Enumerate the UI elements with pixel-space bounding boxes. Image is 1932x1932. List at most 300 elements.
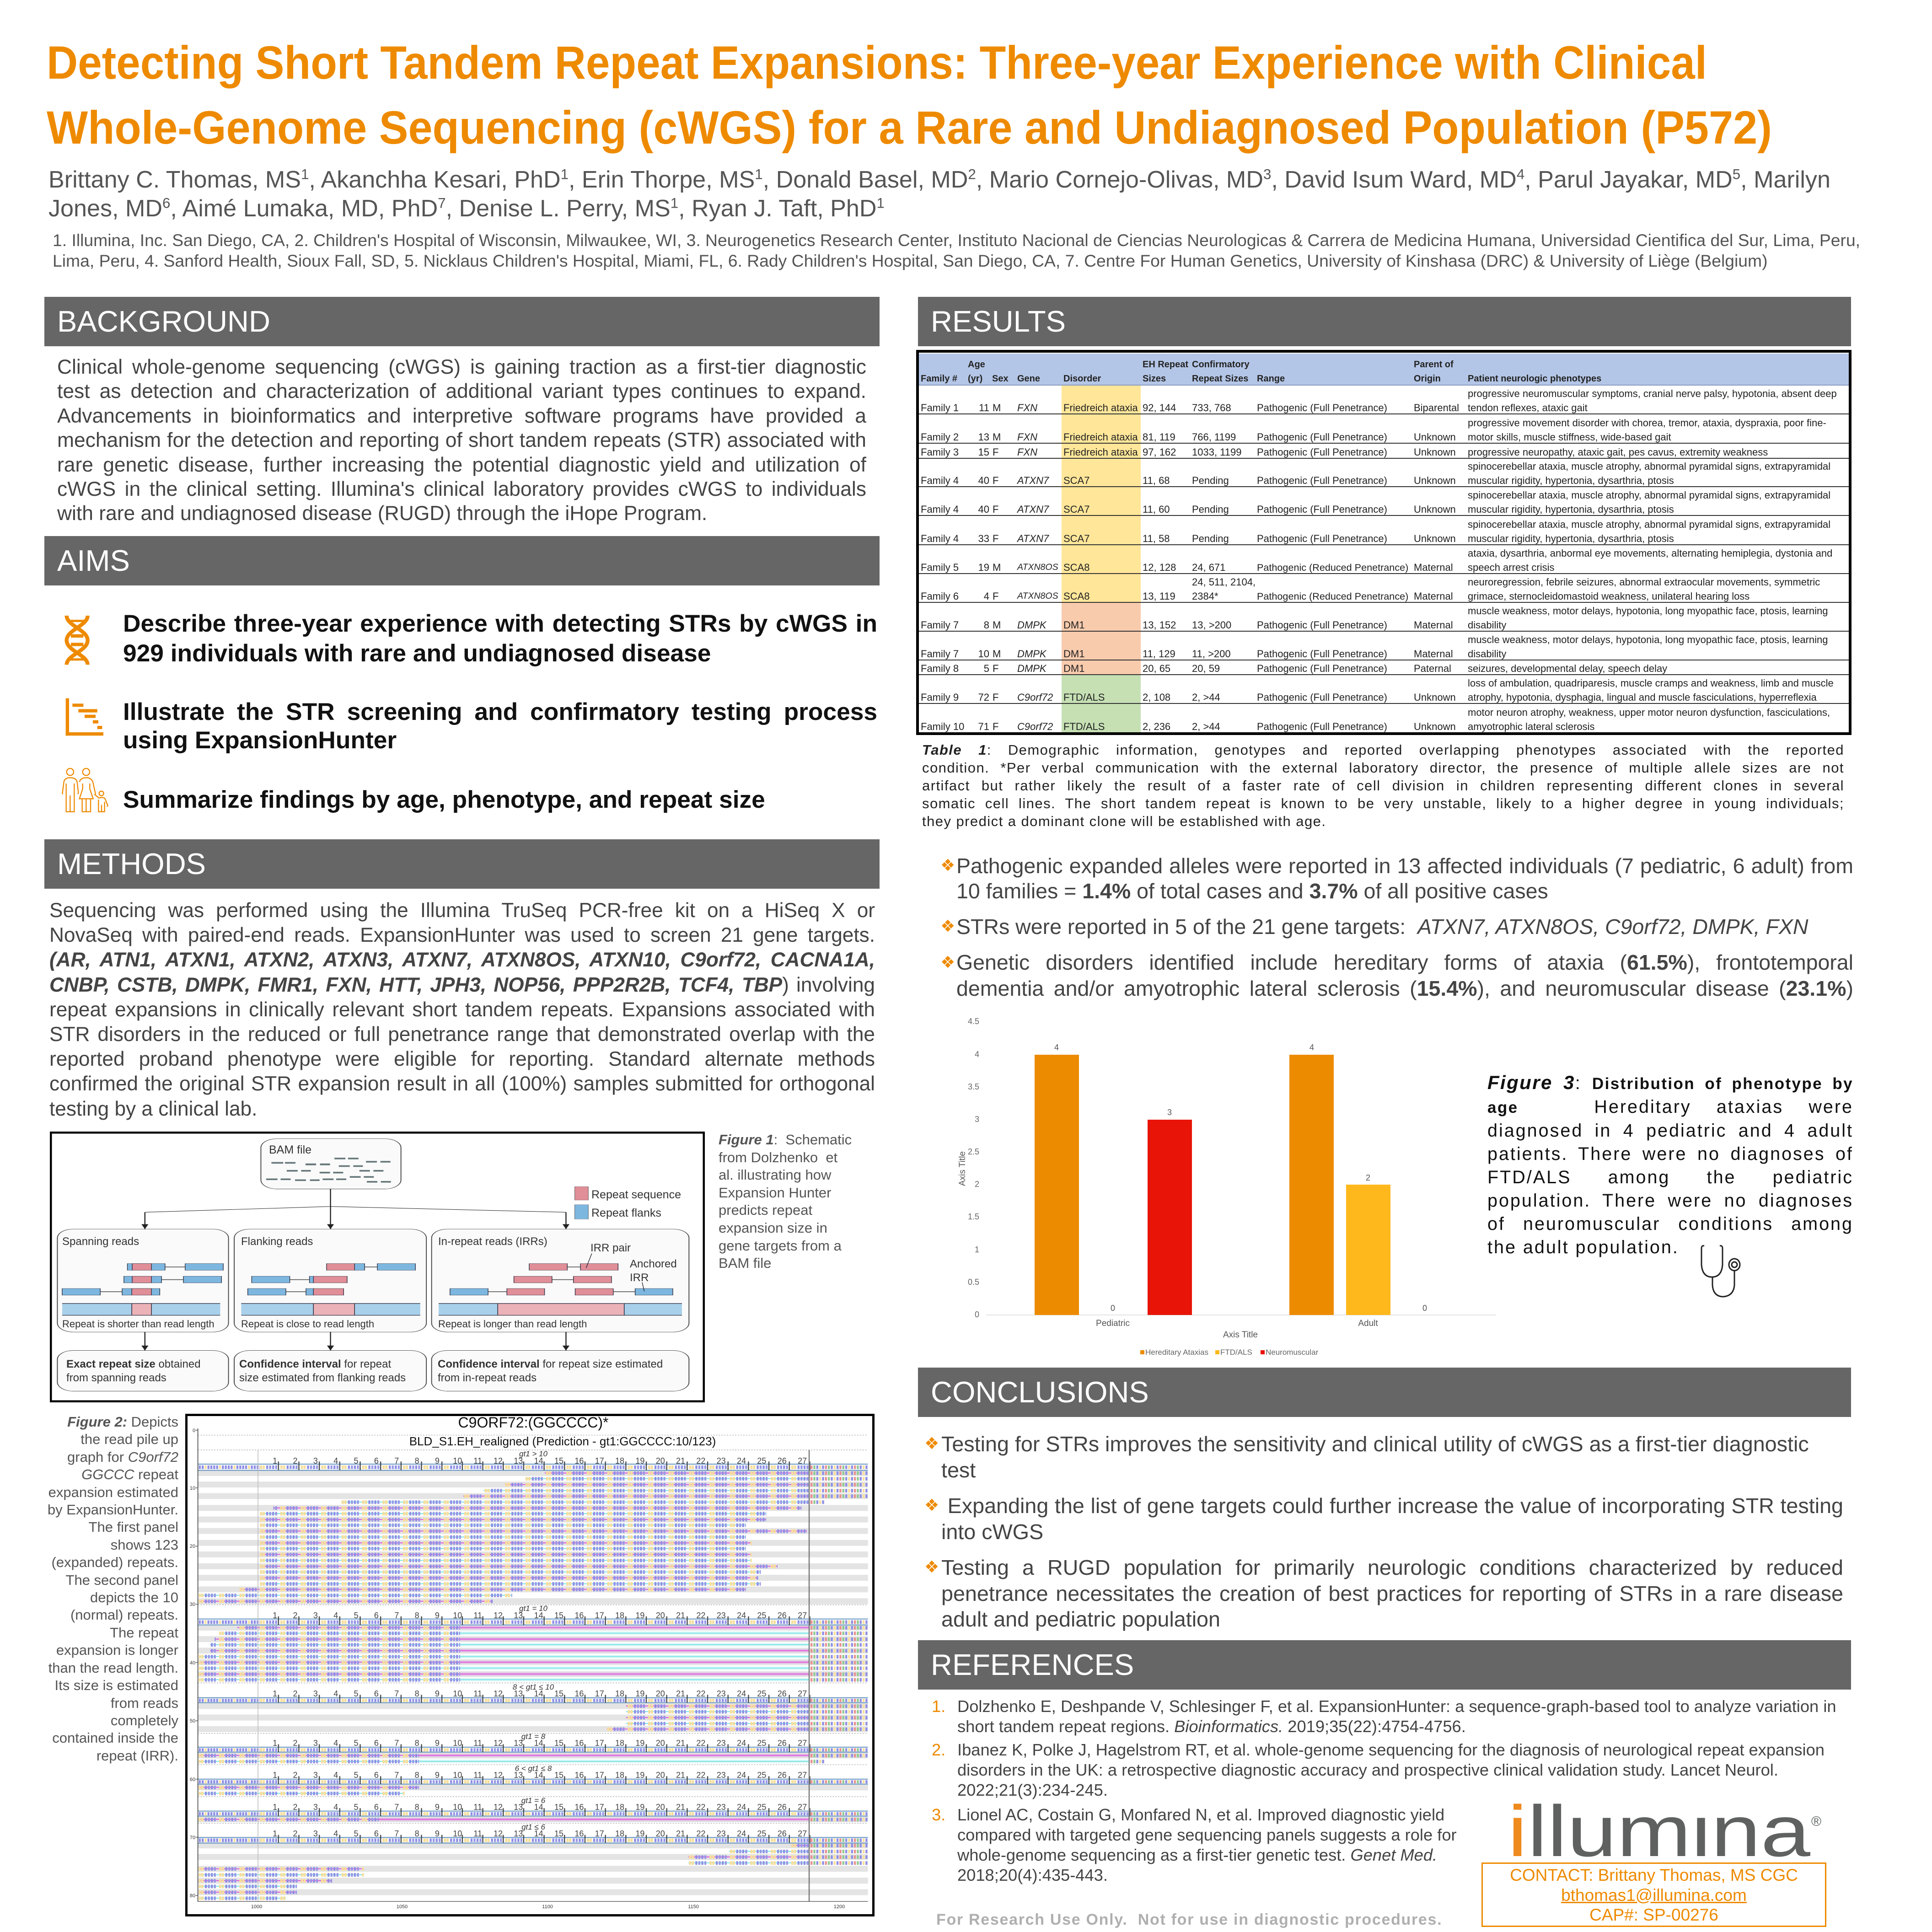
background text: rare genetic disease, further increasing the potential diagnostic yield and utilization of <box>57 454 866 476</box>
position numbers: 6 < gt1 <= 8: 7 <box>394 1771 399 1780</box>
row: family 1: Family 1 <box>921 402 959 413</box>
position numbers: 6 < gt1 <= 8: 11 <box>473 1771 482 1780</box>
figure 2: read pile-up graph: 30 <box>190 1602 195 1607</box>
figure 2 caption: expansion estimated <box>48 1484 178 1500</box>
position numbers: gt1 > 10: 16 <box>574 1456 584 1465</box>
position numbers: gt1 > 10: 1 <box>273 1456 277 1465</box>
figure 3 caption: of neuromuscular conditions among <box>1487 1214 1853 1234</box>
row: family 2: 13 <box>978 431 989 443</box>
bar chart: phenotype by age: Pediatric <box>1096 1319 1130 1328</box>
position numbers: gt1 = 6: 26 <box>778 1803 787 1812</box>
background text: mechanism for the detection and reporting of short tandem repeats (STR) associated with <box>57 429 866 451</box>
row: family 4b: 11, 60 <box>1143 504 1170 515</box>
position numbers: gt1 > 10: 14 <box>534 1456 543 1465</box>
row: family 7a: 13, 152 <box>1143 619 1176 631</box>
table 1 caption: condition. *Per verbal communication with the external laboratory director, the presence of multiple allele sizes are not <box>922 760 1844 776</box>
row: family 7b: Pathogenic (Full Penetrance) <box>1257 648 1387 660</box>
figure 2 caption: contained inside the <box>52 1730 178 1746</box>
bar chart: phenotype by age: Neuromuscular <box>1266 1348 1319 1357</box>
row: family 2: Friedreich ataxia <box>1063 431 1138 443</box>
bar chart: phenotype by age: 2 <box>975 1180 979 1189</box>
row: family 4c: Unknown <box>1414 533 1456 544</box>
row: family 7a: DMPK <box>1017 619 1046 631</box>
row: family 8: 20, 65 <box>1143 663 1170 674</box>
table header: Disorder <box>1063 374 1101 384</box>
row: family 9 <box>919 675 1849 704</box>
legend swatches <box>575 1186 588 1200</box>
position numbers: gt1 = 6: 21 <box>676 1803 685 1812</box>
figure 2 caption: (normal) repeats. <box>70 1607 178 1623</box>
row: family 4c: spinocerebellar ataxia, muscle atrophy, abnormal pyramidal signs, extrapyramidal <box>1468 519 1830 530</box>
figure 2 caption: by ExpansionHunter. <box>48 1502 178 1518</box>
panel: conclusions: ❖ <box>924 1558 939 1577</box>
position numbers: gt1 = 10: 7 <box>394 1611 399 1620</box>
figure 1 caption: BAM file <box>719 1255 771 1271</box>
row: family 4b: Family 4 <box>921 504 959 515</box>
reference 1 <box>957 1696 1849 1736</box>
conclusion 3: adult and pediatric population <box>941 1607 1220 1631</box>
position numbers: gt1 = 6: 6 <box>374 1803 379 1812</box>
table header <box>919 354 1849 386</box>
row: family 5: Maternal <box>1414 562 1453 573</box>
position numbers: gt1 <= 6: 8 <box>415 1829 419 1838</box>
reference bars <box>62 1304 682 1315</box>
row: family 5: SCA8 <box>1063 562 1089 573</box>
position numbers: gt1 = 8: 24 <box>737 1739 746 1748</box>
figure 2: read pile-up graph <box>185 1414 875 1916</box>
figure 2: read pile-up graph: 1150 <box>688 1904 699 1910</box>
row: family 8: seizures, developmental delay, speech delay <box>1468 663 1667 674</box>
heading: methods: METHODS <box>57 847 206 880</box>
row: family 7b: disability <box>1468 648 1506 660</box>
position numbers: gt1 = 8: 17 <box>595 1739 604 1748</box>
BAM reads <box>266 1158 391 1183</box>
position numbers: gt1 = 8: 8 <box>415 1739 419 1748</box>
row: family 3: 97, 162 <box>1143 446 1176 458</box>
position numbers: gt1 = 6: 8 <box>415 1803 419 1812</box>
reference 1: short tandem repeat regions. Bioinformatics. 2019;35(22):4754-4756. <box>957 1717 1466 1735</box>
row: family 4b: spinocerebellar ataxia, muscle atrophy, abnormal pyramidal signs, extrapyramidal <box>1468 489 1830 501</box>
position numbers: gt1 = 8: 1 <box>273 1739 277 1748</box>
affiliations: 1. Illumina, Inc. San Diego, CA, 2. Children's Hospital of Wisconsin, Milwaukee, WI, 3. Neurogenetics Research Center, Instituto Nacional de Ciencias Neurologicas & Carrera de Medicina Humana, Universidad Cientifica del Sur, Lima, Peru, <box>53 231 1860 250</box>
row: family 1: Pathogenic (Full Penetrance) <box>1257 402 1387 413</box>
row: family 9: 2, 108 <box>1143 692 1170 703</box>
row: family 2: Pathogenic (Full Penetrance) <box>1257 431 1387 443</box>
position numbers: gt1 = 8: 21 <box>676 1739 685 1748</box>
position numbers: 8 < gt1 <= 10: 24 <box>737 1689 746 1698</box>
row: family 4b: SCA7 <box>1063 504 1089 515</box>
position numbers: gt1 > 10: 2 <box>293 1456 298 1465</box>
position numbers: 8 < gt1 <= 10: 27 <box>798 1689 807 1698</box>
authors: Brittany C. Thomas, MS1, Akanchha Kesari, PhD1, Erin Thorpe, MS1, Donald Basel, MD2, Mario Cornejo-Olivas, MD3, David Isum Ward, MD4, Parul Jayakar, MD5, Marilyn <box>48 166 1830 193</box>
figure 2: read pile-up graph: 8 < gt1 ≤ 10 <box>513 1683 554 1691</box>
illumina logo: ® <box>1811 1814 1821 1829</box>
position numbers: gt1 = 10: 12 <box>494 1611 503 1620</box>
bar chart: phenotype by age: 4.5 <box>968 1017 979 1026</box>
row: family 6: grimace, sternocleidomastoid weakness, unilateral hearing loss <box>1468 590 1750 602</box>
row: family 10: FTD/ALS <box>1063 721 1105 732</box>
figure 2: read pile-up graph: 1200 <box>834 1904 845 1910</box>
figure 2: read pile-up graph: 40 <box>190 1660 195 1666</box>
position numbers: 8 < gt1 <= 10: 15 <box>554 1689 564 1698</box>
row: family 4c: SCA7 <box>1063 533 1089 544</box>
position numbers: 6 < gt1 <= 8: 14 <box>534 1771 543 1780</box>
position numbers: gt1 = 10: 27 <box>798 1611 807 1620</box>
position numbers: gt1 <= 6: 4 <box>333 1829 338 1838</box>
icon: stethoscope <box>1700 1241 1744 1299</box>
position numbers: gt1 > 10: 26 <box>778 1456 787 1465</box>
bar chart: phenotype by age: 4 <box>975 1050 979 1059</box>
background text: cWGS in the clinical setting. Illumina's clinical laboratory provides cWGS to individuals <box>57 478 866 500</box>
row: family 5: speech arrest crisis <box>1468 562 1555 573</box>
position numbers: gt1 = 10: 24 <box>737 1611 746 1620</box>
row: family 3: F <box>993 446 998 458</box>
position numbers: gt1 = 10: 13 <box>514 1611 523 1620</box>
position numbers: gt1 = 8: 15 <box>554 1739 564 1748</box>
position numbers: gt1 > 10: 27 <box>798 1456 807 1465</box>
position numbers: 6 < gt1 <= 8: 16 <box>574 1771 584 1780</box>
row: family 10: 2, >44 <box>1192 721 1220 732</box>
aim 1: 929 individuals with rare and undiagnosed disease <box>123 640 711 667</box>
position numbers: gt1 = 10: 21 <box>676 1611 685 1620</box>
position numbers: gt1 = 6: 24 <box>737 1803 746 1812</box>
row: family 10: C9orf72 <box>1017 721 1053 732</box>
row: family 7a: 13, >200 <box>1192 619 1231 631</box>
position numbers: 6 < gt1 <= 8: 5 <box>354 1771 359 1780</box>
bar chart: phenotype by age: 1 <box>975 1245 979 1254</box>
figure 3 caption: the adult population. <box>1487 1237 1679 1257</box>
figure 1: ExpansionHunter schematic: Anchored <box>630 1258 677 1270</box>
position numbers: 8 < gt1 <= 10: 10 <box>453 1689 462 1698</box>
reference 2: disorders in the UK: a retrospective diagnostic accuracy and prospective clinical validation study. Lancet Neurol. <box>957 1760 1778 1779</box>
heading: background <box>44 297 880 346</box>
position numbers: 8 < gt1 <= 10: 26 <box>778 1689 787 1698</box>
position numbers: gt1 <= 6 <box>265 1829 812 1838</box>
row: family 4a: Family 4 <box>921 475 959 486</box>
reference 3 <box>957 1805 1483 1885</box>
row: family 6: Family 6 <box>921 590 959 602</box>
row: family 2: 766, 1199 <box>1192 431 1236 443</box>
row: family 4a: muscular rigidity, hypertonia, dysarthria, ptosis <box>1468 475 1674 486</box>
figure 1: ExpansionHunter schematic: IRR pair <box>590 1242 631 1254</box>
position numbers: gt1 = 6: 20 <box>656 1803 665 1812</box>
row: family 7b <box>919 632 1849 660</box>
row: family 7b: DMPK <box>1017 648 1046 660</box>
heading: methods <box>44 839 880 889</box>
methods text: reported proband phenotype were eligible for reporting. Standard alternate methods <box>49 1048 875 1070</box>
figure 3 caption: age Hereditary ataxias were <box>1487 1097 1853 1117</box>
position numbers: 6 < gt1 <= 8: 6 <box>374 1771 379 1780</box>
row: family 5 <box>919 545 1849 574</box>
background text: test as detection and characterization of additional variant types continues to expand. <box>57 380 866 402</box>
contact box: bthomas1@illumina.com <box>1561 1885 1747 1905</box>
position numbers: gt1 <= 6: 7 <box>394 1829 399 1838</box>
result bullet 3: dementia and/or amyotrophic lateral sclerosis (15.4%), and neuromuscular disease (23.1%) <box>956 977 1853 1000</box>
position numbers: gt1 = 8: 14 <box>534 1739 543 1748</box>
position numbers: 8 < gt1 <= 10: 4 <box>333 1689 338 1698</box>
position numbers: gt1 = 10: 1 <box>273 1611 277 1620</box>
row: family 4c: 33 <box>978 533 989 544</box>
row: family 4c: F <box>993 533 998 544</box>
row: family 1: FXN <box>1017 402 1037 413</box>
figure 1: ExpansionHunter schematic: Repeat sequence <box>591 1188 681 1201</box>
contact box: CONTACT: Brittany Thomas, MS CGC <box>1510 1866 1798 1884</box>
figure 2: read pile-up graph: 0 <box>193 1428 195 1433</box>
position numbers: gt1 > 10 <box>265 1456 812 1465</box>
position numbers: gt1 = 8: 11 <box>473 1739 482 1748</box>
row: family 4a: 40 <box>978 475 989 486</box>
figure 1 caption: predicts repeat <box>719 1202 812 1218</box>
row: family 2: progressive movement disorder with chorea, tremor, ataxia, dyspraxia, poor fine- <box>1468 417 1826 429</box>
aim 1: Describe three-year experience with detecting STRs by cWGS in <box>123 610 877 637</box>
methods text: NovaSeq with paired-end reads. ExpansionHunter was used to screen 21 gene targets. <box>49 924 875 946</box>
position numbers: gt1 = 8: 9 <box>435 1739 440 1748</box>
figure 2: read pile-up graph: 60 <box>190 1777 195 1782</box>
figure 1: ExpansionHunter schematic <box>50 1132 705 1402</box>
position numbers: gt1 = 10: 8 <box>415 1611 419 1620</box>
position numbers: 6 < gt1 <= 8: 12 <box>494 1771 503 1780</box>
row: family 5: Family 5 <box>921 562 959 573</box>
position numbers: gt1 > 10: 13 <box>514 1456 523 1465</box>
position numbers: gt1 <= 6: 5 <box>354 1829 359 1838</box>
figure 1 caption: from Dolzhenko et <box>719 1149 837 1165</box>
row: family 5: 12, 128 <box>1143 562 1176 573</box>
position numbers: gt1 = 10: 25 <box>757 1611 766 1620</box>
row: family 7b: 10 <box>978 648 989 660</box>
position numbers: gt1 <= 6: 15 <box>554 1829 564 1838</box>
panel: conclusions: ❖ <box>924 1496 939 1515</box>
reference bars <box>260 1465 809 1842</box>
row: family 4a: spinocerebellar ataxia, muscle atrophy, abnormal pyramidal signs, extrapyramidal <box>1468 461 1830 472</box>
flow lines <box>145 1189 566 1351</box>
position numbers: gt1 > 10: 3 <box>313 1456 318 1465</box>
figure 1: ExpansionHunter schematic: size estimated from flanking reads <box>239 1372 406 1384</box>
row: family 4c <box>919 516 1849 545</box>
panel: references: 1. <box>932 1697 945 1716</box>
result bullet 3 <box>956 950 1853 1002</box>
row: family 9: Unknown <box>1414 692 1456 703</box>
panel: aims <box>44 536 880 833</box>
background text: Clinical whole-genome sequencing (cWGS) is gaining traction as a first-tier diagnostic <box>57 356 866 378</box>
pink read segments <box>132 1264 618 1295</box>
position numbers: gt1 = 6: 25 <box>757 1803 766 1812</box>
position numbers: gt1 = 10: 17 <box>595 1611 604 1620</box>
position numbers: gt1 <= 6: 26 <box>778 1829 787 1838</box>
position numbers: gt1 = 6: 3 <box>313 1803 318 1812</box>
row: family 3 <box>919 444 1849 459</box>
row: family 1: Friedreich ataxia <box>1063 402 1138 413</box>
row: family 4b: muscular rigidity, hypertonia, dysarthria, ptosis <box>1468 504 1674 515</box>
figure 2: read pile-up graph: 1100 <box>542 1904 553 1910</box>
row: family 10 <box>919 704 1849 732</box>
title <box>41 32 1788 165</box>
row: family 1: tendon reflexes, ataxic gait <box>1468 402 1588 413</box>
position numbers: 8 < gt1 <= 10: 22 <box>696 1689 705 1698</box>
position numbers: gt1 <= 6: 12 <box>494 1829 503 1838</box>
background text: with rare and undiagnosed disease (RUGD) through the iHope Program. <box>57 502 707 525</box>
position numbers: gt1 = 10: 18 <box>615 1611 624 1620</box>
position numbers: gt1 > 10: 4 <box>333 1456 338 1465</box>
figure 2: read pile-up graph: 6 < gt1 ≤ 8 <box>515 1764 552 1773</box>
row: family 5: 19 <box>978 562 989 573</box>
position numbers: 8 < gt1 <= 10: 8 <box>415 1689 419 1698</box>
methods text <box>49 898 875 1122</box>
position numbers: gt1 = 10: 3 <box>313 1611 318 1620</box>
position numbers: gt1 = 6: 16 <box>574 1803 584 1812</box>
row: family 2: 81, 119 <box>1143 431 1175 443</box>
position numbers: gt1 = 10: 2 <box>293 1611 298 1620</box>
figure 2 caption <box>41 1413 178 1765</box>
row: family 4c: 11, 58 <box>1143 533 1170 544</box>
position numbers: gt1 = 6: 22 <box>696 1803 705 1812</box>
bar chart: phenotype by age: Axis Title <box>958 1151 967 1186</box>
position numbers: gt1 = 8: 13 <box>514 1739 523 1748</box>
table 1 caption: somatic cell lines. The short tandem repeat is known to be very unstable, likely to a higher degree in young individuals; <box>922 795 1844 811</box>
figure 2 caption: expansion is longer <box>56 1642 178 1658</box>
position numbers: gt1 > 10: 6 <box>374 1456 379 1465</box>
position numbers: gt1 = 10: 4 <box>333 1611 338 1620</box>
row: family 5: M <box>993 562 1001 573</box>
figure 3 caption: FTD/ALS among the pediatric <box>1487 1167 1853 1187</box>
position numbers: gt1 = 6: 5 <box>354 1803 359 1812</box>
bar chart: phenotype by age: 3 <box>975 1115 979 1124</box>
row: family 4b: Pending <box>1192 504 1229 515</box>
table 1 caption: Table 1: Demographic information, genotypes and reported overlapping phenotypes associated with the reported <box>922 742 1844 758</box>
row: family 6: SCA8 <box>1063 590 1089 602</box>
position numbers: gt1 > 10: 22 <box>696 1456 705 1465</box>
figure 1: ExpansionHunter schematic: Repeat is longer than read length <box>438 1318 587 1330</box>
group rows: expanded reads <box>199 1471 809 1900</box>
conclusion 1: test <box>941 1458 976 1482</box>
conclusion 2: Expanding the list of gene targets could further increase the value of incorporating STR testing <box>948 1494 1843 1518</box>
position numbers: 6 < gt1 <= 8: 19 <box>635 1771 644 1780</box>
row: family 6: 4 <box>984 590 989 602</box>
position numbers: gt1 = 6: 4 <box>333 1803 338 1812</box>
position numbers: 8 < gt1 <= 10: 21 <box>676 1689 685 1698</box>
row: family 9: FTD/ALS <box>1063 692 1105 703</box>
row: family 4a: Pending <box>1192 475 1229 486</box>
figure 2: read pile-up graph: 10 <box>190 1486 195 1491</box>
position numbers: gt1 = 10: 9 <box>435 1611 440 1620</box>
table header: Confirmatory <box>1192 360 1250 370</box>
figure 2 caption: shows 123 <box>111 1537 178 1553</box>
position numbers: 8 < gt1 <= 10: 25 <box>757 1689 766 1698</box>
figure 2 caption: repeat (IRR). <box>97 1748 178 1764</box>
figure 2: read pile-up graph: gt1 = 10 <box>519 1604 548 1613</box>
position numbers: 8 < gt1 <= 10 <box>265 1689 812 1698</box>
bar chart: phenotype by age <box>956 1011 1505 1363</box>
methods text: STR disorders in the reduced or full penetrance range that demonstrated overlap with the <box>49 1023 875 1046</box>
row: family 10: Family 10 <box>921 721 964 732</box>
figure 2: read pile-up graph: gt1 > 10 <box>519 1449 548 1458</box>
blue read segments <box>62 1264 673 1295</box>
row: family 7b: M <box>993 648 1001 660</box>
conclusion 1 <box>941 1431 1843 1483</box>
position numbers: 6 < gt1 <= 8: 8 <box>415 1771 419 1780</box>
position numbers: gt1 > 10: 25 <box>757 1456 766 1465</box>
position numbers: 8 < gt1 <= 10: 14 <box>534 1689 543 1698</box>
table header: Sizes <box>1143 374 1166 384</box>
result bullet 1: 10 families = 1.4% of total cases and 3.7% of all positive cases <box>956 879 1548 903</box>
position numbers: gt1 = 8 <box>265 1739 812 1748</box>
row: family 9: Family 9 <box>921 692 959 703</box>
position numbers: 6 < gt1 <= 8: 15 <box>554 1771 564 1780</box>
row: family 7b: Family 7 <box>921 648 959 660</box>
position numbers: 6 < gt1 <= 8: 22 <box>696 1771 705 1780</box>
position numbers: 8 < gt1 <= 10: 11 <box>473 1689 482 1698</box>
panel: results: ❖ <box>940 856 955 875</box>
position numbers: gt1 = 8: 7 <box>394 1739 399 1748</box>
position numbers: gt1 = 6 <box>265 1803 812 1812</box>
position numbers: gt1 <= 6: 20 <box>656 1829 665 1838</box>
table 1 caption: artifact but rather likely the result of a faster rate of cell division in children representing different clones in several <box>922 778 1844 794</box>
position numbers: 8 < gt1 <= 10: 9 <box>435 1689 440 1698</box>
heading: aims <box>44 536 880 585</box>
methods text: confirmed the original STR expansion result in all (100%) samples submitted for orthogonal <box>49 1073 875 1095</box>
position numbers: gt1 <= 6: 17 <box>595 1829 604 1838</box>
position numbers: gt1 <= 6: 1 <box>273 1829 277 1838</box>
row: family 5: Pathogenic (Reduced Penetrance) <box>1257 562 1408 573</box>
row: family 4a: SCA7 <box>1063 475 1089 486</box>
table header: Parent of <box>1414 360 1454 370</box>
position numbers: gt1 > 10: 5 <box>354 1456 359 1465</box>
row: family 9: 72 <box>978 692 989 703</box>
row: family 8: F <box>993 663 998 674</box>
row: family 3: 1033, 1199 <box>1192 446 1241 458</box>
position numbers: gt1 > 10: 8 <box>415 1456 419 1465</box>
figure 2: read pile-up graph: 50 <box>190 1718 195 1724</box>
position numbers: gt1 = 8: 27 <box>798 1739 807 1748</box>
row: family 6 <box>919 574 1849 603</box>
figure 1: ExpansionHunter schematic: Repeat is close to read length <box>241 1318 374 1330</box>
figure 2: read pile-up graph: 1000 <box>251 1904 262 1910</box>
table header: (yr) <box>968 374 982 384</box>
position numbers: gt1 = 8: 19 <box>635 1739 644 1748</box>
row: family 3: progressive neuropathy, ataxic gait, pes cavus, extremity weakness <box>1468 446 1768 458</box>
row: family 10: F <box>993 721 998 732</box>
row: family 6: F <box>993 590 998 602</box>
figure 2 caption: The repeat <box>110 1625 178 1641</box>
row: family 2 <box>919 414 1849 444</box>
position numbers: gt1 = 10: 10 <box>453 1611 462 1620</box>
row: family 4c: Family 4 <box>921 533 959 544</box>
row: family 8 <box>919 660 1849 675</box>
bar chart: phenotype by age: FTD/ALS <box>1220 1348 1252 1357</box>
table header: Repeat Sizes <box>1192 374 1248 384</box>
row: family 3: 15 <box>978 446 989 458</box>
aim 1 <box>123 609 877 668</box>
figure 1: ExpansionHunter schematic: In-repeat reads (IRRs) <box>438 1235 547 1248</box>
conclusion 3: penetrance necessitates the creation of best practices for reporting of STRs in a rare disease <box>941 1582 1843 1605</box>
figure 3 caption: diagnosed in 4 pediatric and 4 adult <box>1487 1121 1853 1141</box>
position numbers: 6 < gt1 <= 8: 27 <box>798 1771 807 1780</box>
row: family 9: Pathogenic (Full Penetrance) <box>1257 692 1387 703</box>
row: family 9: 2, >44 <box>1192 692 1220 703</box>
row: family 10: Pathogenic (Full Penetrance) <box>1257 721 1387 732</box>
row: family 4a: ATXN7 <box>1017 475 1049 486</box>
position numbers: gt1 <= 6: 11 <box>473 1829 482 1838</box>
row: family 4a <box>919 459 1849 487</box>
row: family 5: ATXN8OS <box>1017 562 1058 572</box>
figure 1 caption <box>719 1131 874 1272</box>
position numbers: gt1 = 6: 23 <box>717 1803 726 1812</box>
position numbers: gt1 = 10: 26 <box>778 1611 787 1620</box>
position numbers: gt1 = 10: 15 <box>554 1611 564 1620</box>
position numbers: 6 < gt1 <= 8: 17 <box>595 1771 604 1780</box>
row: family 7b: 11, >200 <box>1192 648 1231 660</box>
position numbers: gt1 = 10: 14 <box>534 1611 543 1620</box>
reference 3: Lionel AC, Costain G, Monfared N, et al. Improved diagnostic yield <box>957 1805 1444 1824</box>
